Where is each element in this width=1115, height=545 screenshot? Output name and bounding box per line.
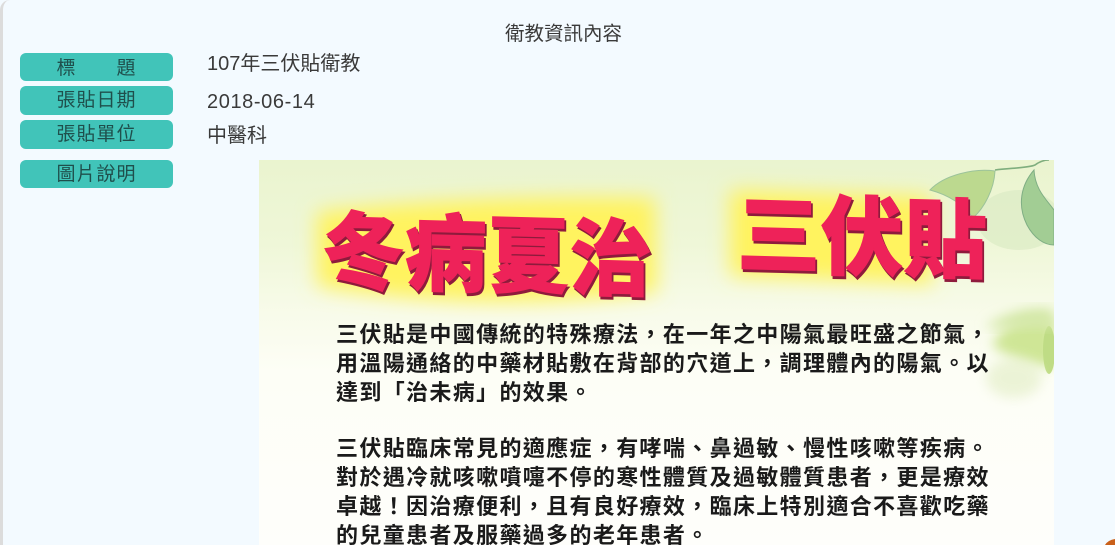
label: post unit: 張貼單位 [56,124,136,145]
paragraph 1 [336,317,990,407]
headline: 三伏貼: 三伏貼 [738,168,988,299]
paragraph 1: 達到「治未病」的效果。 [336,375,593,407]
label: image description: 圖片說明 [56,164,136,185]
label: post date [20,86,173,115]
paragraph 2: 卓越！因治療便利，且有良好療效，臨床上特別適合不喜歡吃藥 [336,489,990,521]
poster image [259,160,1054,545]
poster background with leaves and title [259,160,1054,402]
value: post date: 2018-06-14 [207,91,315,113]
leaves [930,160,1061,398]
value: post unit: 中醫科 [207,125,267,147]
headline: 三伏貼: 三伏貼 [737,165,987,297]
heading: 衛教資訊內容 [505,23,622,45]
yellow glow behind headline [317,190,933,302]
value: title: 107年三伏貼衛教 [207,53,360,75]
label: image description [20,160,173,188]
paragraph 1: 三伏貼是中國傳統的特殊療法，在一年之中陽氣最旺盛之節氣， [336,317,990,349]
label: post date: 張貼日期 [56,90,136,111]
label: post unit [20,120,173,149]
headline: 冬病夏治: 冬病夏治 [322,185,652,315]
label: title: 標 題 [56,58,136,79]
corner orange button [1105,539,1115,545]
paragraph 2: 對於遇冷就咳嗽噴嚏不停的寒性體質及過敏體質患者，更是療效 [336,460,990,492]
background wash [259,160,1054,545]
headline: 冬病夏治: 冬病夏治 [324,188,654,317]
paragraph 2 [336,431,990,545]
paragraph 2: 三伏貼臨床常見的適應症，有哮喘、鼻過敏、慢性咳嗽等疾病。 [336,431,990,463]
paragraph 1: 用溫陽通絡的中藥材貼敷在背部的穴道上，調理體內的陽氣。以 [336,346,990,378]
page edge [0,0,10,545]
label: title [20,53,173,81]
